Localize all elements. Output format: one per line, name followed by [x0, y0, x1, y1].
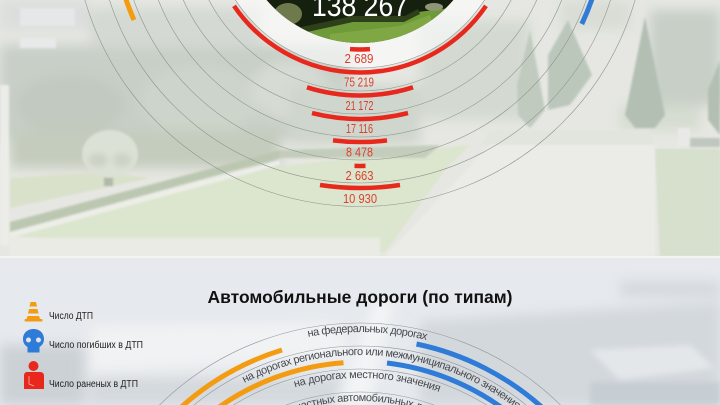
legend text: deaths: Число погибших в ДТП: [49, 339, 143, 351]
road type labels: на федеральных дорогах: [308, 326, 428, 340]
red values: 10 930: [343, 191, 377, 206]
cypress trees: [625, 17, 665, 128]
panel: lower photo background: [0, 258, 720, 405]
panel: lower circular chart: [159, 322, 561, 405]
red values: [343, 51, 377, 206]
orange arcs: [178, 350, 344, 405]
tree: round bush: [82, 130, 138, 186]
icon: injured person: [24, 361, 44, 389]
red arcs: [234, 6, 486, 188]
red values: 75 219: [344, 74, 374, 90]
red values: 8 478: [346, 144, 373, 160]
legend: [23, 302, 143, 390]
red values: 17 116: [346, 121, 373, 136]
lawn: [10, 145, 470, 252]
panel: upper circular chart: [74, 0, 646, 206]
blue arcs: [387, 344, 545, 405]
paved avenue: [385, 145, 655, 256]
photo disc with total: [266, 0, 454, 43]
legend text: crashes: Число ДТП: [49, 311, 93, 322]
red values: 2 663: [346, 168, 374, 183]
heading: road types: Автомобильные дороги (по типам): [208, 287, 512, 307]
panel: upper photo background: [0, 0, 720, 258]
orange arc: [118, 0, 134, 20]
blue arc: [582, 0, 600, 24]
white halo disc: [212, 0, 508, 68]
icon: skull: [23, 329, 44, 352]
concentric rings: [159, 322, 561, 405]
concentric rings: [74, 0, 646, 206]
red values: 2 689: [344, 51, 374, 66]
legend text: injured: Число раненых в ДТП: [49, 379, 138, 390]
road type labels: на дорогах местного значения: [294, 372, 440, 392]
red values: 21 172: [346, 98, 374, 113]
icon: traffic cone: [24, 302, 42, 322]
